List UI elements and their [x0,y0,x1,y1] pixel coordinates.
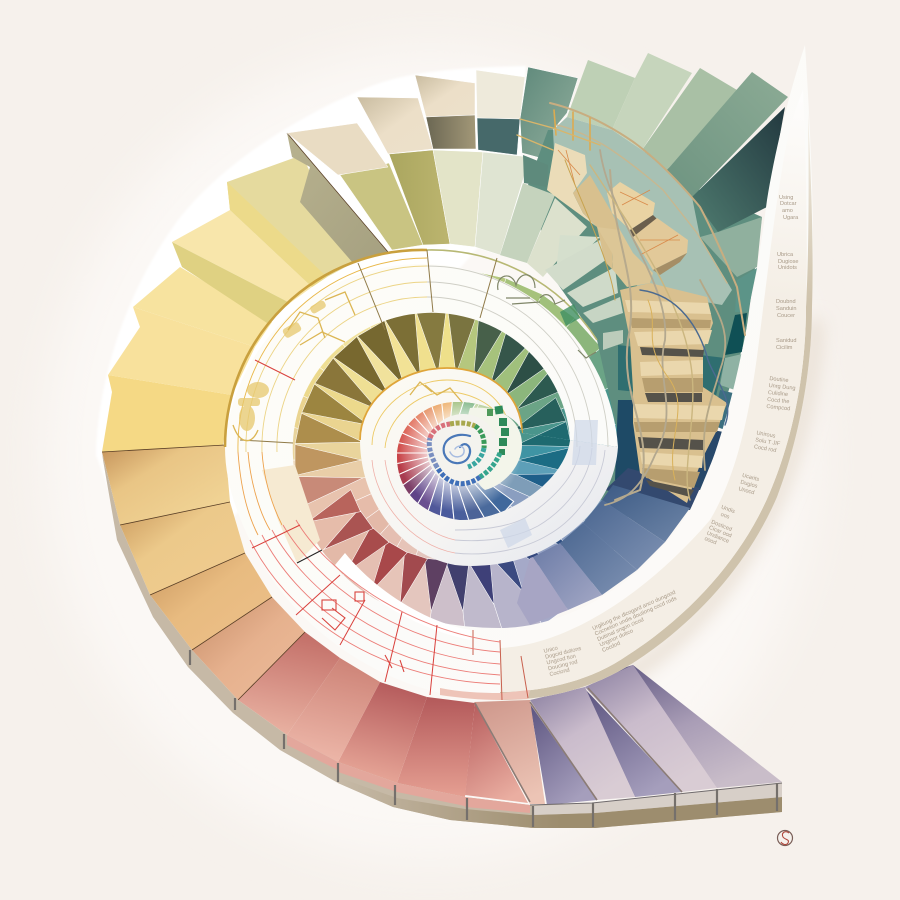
cream patch in lower band [262,465,320,563]
caption 6: Cocd rod [753,444,777,454]
base behind staircase [528,130,762,510]
caption 10: Cocnetion undis doutiong cocd rods [594,596,678,638]
caption 8 [718,505,736,522]
caption 5: Cocd the [767,397,790,405]
caption 3: Doubnd [776,299,796,305]
chart: outer spiral steps, left and bottom [102,133,782,805]
white stripe in lower band [335,553,470,640]
caption 5: Unrg Dung [768,383,796,392]
radial dividers [240,250,497,563]
step: yellow treads [102,133,388,452]
caption 9: oood [703,536,717,546]
step: lilac bottom fan [530,665,782,805]
caption 6: Unirous [756,430,776,440]
orange curved lines on left band [238,452,282,535]
railings [517,103,745,505]
caption 8: Undis [720,505,736,515]
filled gold figures [238,300,327,431]
centre disc [427,414,499,486]
front face of outer stair with railing [102,452,782,828]
centre dashes [429,423,500,484]
step: top right green treads [553,53,788,305]
ring: inner band [360,368,618,566]
caption 11 [543,640,587,678]
soft halo behind spiral [45,50,815,860]
caption 11: Doucing rod [548,659,578,672]
stair dark bands [638,347,704,497]
caption 10 [592,590,686,654]
caption 1 [779,195,799,221]
caption 5: Compcod [766,404,791,412]
crescent with green patches [466,405,522,490]
caption 10: Dutimal sngon cicod [596,617,645,643]
icons: gold sketches on band [233,292,462,441]
caption 2: Unidots [778,265,797,271]
stair highlights [625,300,725,468]
caption 10: Cocdod [601,641,621,654]
olive outer edge of band [427,250,597,340]
red radial dividers [252,360,437,695]
chart: inner fan of spiral [397,402,570,520]
tail drop shadow [500,320,815,712]
caption 11: Unico [543,646,559,655]
gold ring curves [360,368,522,448]
caption 2: Dugiose [778,259,799,265]
chart: green and blue steps inside the tail [500,53,788,625]
stair mid tones [630,318,720,488]
caption 7: Unocd [738,486,755,496]
caption 9 [703,519,735,551]
lower stair column [620,283,727,503]
tail and outer white band [225,45,813,700]
caption 9: Cicar ood [708,525,732,539]
pink risers [287,735,530,813]
caption 10: Urgitung the dicogard anco dungood [592,590,677,632]
gold concentric lines [238,258,427,452]
tail cream face [500,90,807,692]
white glow around top steps [96,66,526,600]
caption 5: Culidine [768,390,788,398]
caption 2: Ubrica [777,252,794,258]
upper stair blocks [547,143,688,287]
caption 11: Dogcid dutions [545,646,582,661]
caption 5 [766,376,797,413]
chart: top steps [287,67,578,255]
caption 4 [776,338,797,351]
grey concentric lines [427,266,608,447]
staircase with railings [517,103,745,505]
icon: signature mark [778,830,792,846]
pink foot on band [440,688,530,700]
caption 7: Dugios [740,480,758,490]
caption 4: Cicilim [776,345,793,351]
caption 3: Sanduin [776,306,797,312]
step: right edge colour strip [615,217,762,490]
step: blue treads [517,468,700,625]
dark seams between steps [102,133,388,700]
red curved lines on lower band [250,520,500,684]
railing posts [190,650,777,827]
caption 1: Ugara [783,215,799,221]
pink ring curves [372,460,455,553]
caption 6: Solu T JIF [755,437,781,448]
step: cream caps [287,67,578,175]
blue band patches [500,420,598,548]
chart: spiral fan between the rings [256,270,638,650]
caption 11: Cociond [549,667,570,678]
green patches [487,405,509,455]
caption 1: Using [779,195,793,201]
centre spiral [444,435,470,463]
caption 11: Ungcod tion [546,653,577,666]
caption 5: Doutine [769,376,789,384]
band detail lines [225,250,608,695]
caption 1: amo [782,208,793,214]
step: red and salmon treads [102,445,545,804]
grey ring curves [455,446,605,554]
caption 6 [753,430,782,455]
diagonal rails [475,688,682,802]
tail tan edge [500,110,813,700]
caption 8: oos [720,512,730,521]
caption 9: Undiance [706,530,730,545]
step: pale wedges beside ring [500,183,623,350]
gold outer edge of band [225,250,427,447]
caption 9: Dosticed [710,519,733,533]
caption 3: Coucer [777,313,795,319]
red seam on band [473,630,528,700]
caption 4: Sanidud [776,338,797,344]
icons: red sketches on band [322,592,404,672]
white fade over inner fan [400,402,519,510]
gold strokes [233,292,462,441]
caption 7 [738,473,760,497]
caption 2 [777,252,799,271]
caption 10: Unginor dutico [599,628,634,648]
text block: tail captions [543,195,799,678]
orange stripes on stair blocks [558,150,680,255]
caption 1: Dotcar [780,201,797,207]
icons: grey-green sketches on band [498,275,596,358]
icon: green patch on band [560,304,580,326]
caption 7: Ucarits [741,473,760,483]
dark teal step under cap [523,155,548,187]
caption 3 [776,299,797,319]
